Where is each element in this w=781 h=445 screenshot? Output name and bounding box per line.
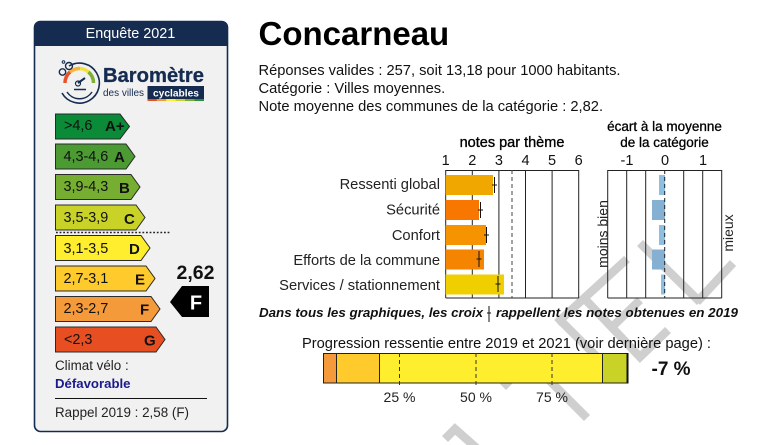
axis labels	[442, 153, 583, 169]
theme labels: Ressenti global	[340, 177, 440, 193]
theme labels: Confort	[392, 228, 440, 244]
logo subtitle: des villes	[103, 87, 144, 99]
score grade marker: F	[190, 292, 202, 314]
logo badge	[148, 86, 204, 101]
2019 reminder: Rappel 2019 : 2,58 (F)	[55, 405, 189, 420]
grade A	[56, 144, 135, 169]
theme labels: Services / stationnement	[279, 278, 440, 294]
axis side label: moins bien: moins bien	[594, 200, 610, 268]
grade C: C	[124, 211, 135, 228]
progression axis labels: 50 %	[460, 389, 492, 405]
grade B: 3,9-4,3	[64, 179, 108, 195]
logo wordmark: Baromètre	[103, 64, 204, 87]
theme labels: Sécurité	[386, 202, 440, 218]
theme bars	[446, 175, 504, 294]
climate value: Défavorable	[55, 376, 130, 391]
progression axis labels: 25 %	[384, 389, 415, 405]
progression bar	[323, 353, 628, 405]
axis labels: 1	[699, 153, 707, 169]
axis labels	[621, 153, 707, 169]
chart heading	[607, 119, 722, 150]
2019 crosses	[476, 177, 500, 292]
progression value: -7 %	[652, 359, 691, 380]
axis labels: 3	[495, 153, 503, 169]
survey details: Réponses valides : 257, soit 13,18 pour 1000 habitants.	[258, 63, 620, 79]
grade threshold dotted line	[56, 232, 171, 234]
chart heading: de la catégorie	[620, 135, 709, 150]
progression axis labels: 75 %	[536, 389, 568, 405]
axis labels: 6	[575, 153, 583, 169]
grade D	[56, 236, 150, 260]
panel header	[34, 21, 228, 46]
axis labels: 0	[661, 153, 669, 169]
grade scale	[56, 114, 171, 352]
grade C	[56, 205, 145, 230]
axis labels: -1	[621, 153, 633, 169]
note about 2019 crosses	[259, 305, 739, 322]
axis side label: mieux: mieux	[720, 214, 736, 252]
chart: notes par thème	[279, 135, 583, 298]
chart heading: écart à la moyenne	[607, 119, 722, 134]
note about 2019 crosses: rappellent les notes obtenues en 2019	[496, 305, 739, 320]
survey details: Note moyenne des communes de la catégorie : 2,82.	[258, 99, 603, 115]
panel: survey summary	[34, 21, 228, 432]
grade F: 2,3-2,7	[64, 301, 108, 317]
logo: Baromètre des villes cyclables	[59, 61, 204, 103]
progression heading: Progression ressentie entre 2019 et 2021 (voir dernière page) :	[302, 336, 711, 352]
theme labels: Efforts de la commune	[293, 253, 440, 269]
grade A+	[56, 114, 130, 139]
grade C: 3,5-3,9	[64, 210, 108, 226]
chart: écart à la moyenne	[594, 119, 736, 298]
grade B	[56, 174, 140, 200]
grade D: 3,1-3,5	[64, 241, 108, 257]
grade F	[56, 296, 160, 322]
panel header: Enquête 2021	[86, 26, 175, 42]
grade F: F	[140, 302, 149, 318]
grade G	[56, 327, 165, 352]
grade A: 4,3-4,6	[64, 149, 108, 165]
grade E: E	[135, 272, 145, 288]
watermark	[445, 243, 733, 445]
chart heading: notes par thème	[460, 135, 564, 151]
grade B: B	[119, 180, 130, 197]
deviation bars	[652, 175, 665, 294]
grade A+: >4,6	[64, 118, 92, 134]
axis labels: 2	[468, 153, 476, 169]
axis labels: 4	[521, 153, 530, 169]
score value: 2,62	[177, 262, 215, 284]
climate label: Climat vélo :	[55, 358, 129, 373]
icon: gauge	[59, 61, 99, 103]
logo badge: cyclables	[153, 88, 199, 100]
axis labels: 5	[548, 153, 556, 169]
grade D: D	[129, 241, 140, 258]
score grade marker	[170, 286, 209, 317]
survey details: Catégorie : Villes moyennes.	[258, 81, 445, 97]
grade G: <2,3	[64, 332, 92, 348]
axis labels: 1	[442, 153, 450, 169]
grade A: A	[114, 149, 125, 166]
grade A+: A+	[105, 118, 125, 135]
progression axis labels	[384, 389, 568, 405]
survey details	[258, 63, 620, 115]
note about 2019 crosses: Dans tous les graphiques, les croix	[259, 305, 484, 320]
title: Concarneau	[258, 15, 449, 52]
theme labels	[279, 177, 440, 294]
grade E	[56, 266, 155, 291]
grade E: 2,7-3,1	[64, 271, 108, 287]
grade G: G	[144, 332, 156, 350]
